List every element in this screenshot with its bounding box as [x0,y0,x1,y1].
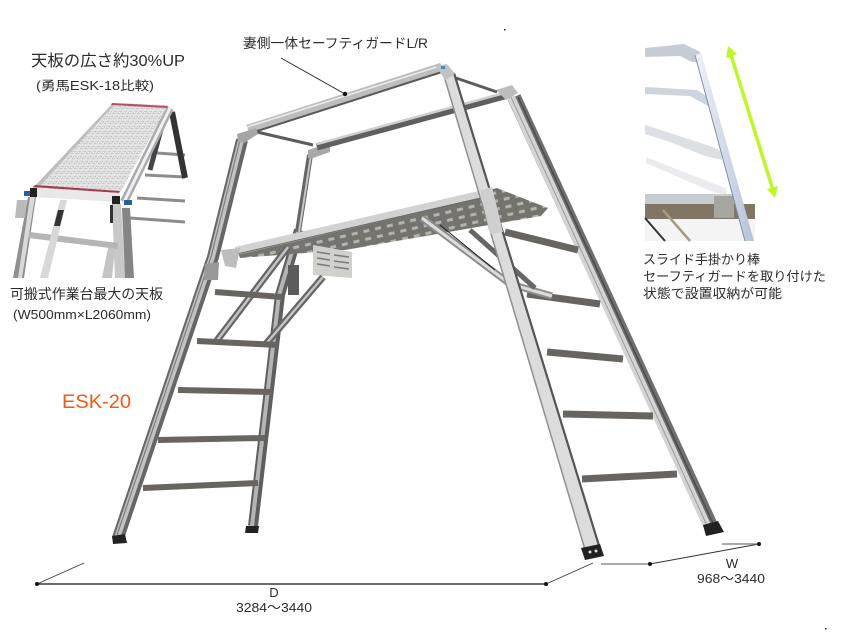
label W: W [726,556,739,571]
back top rail [317,85,518,147]
caption: dimensions: (W500mm×L2060mm) [13,308,151,322]
instruction label [313,245,352,278]
title: tabletop width: 天板の広さ約30%UP [31,52,185,70]
cross bars [257,77,497,145]
base [645,194,740,204]
rungs: left [143,292,282,488]
sliding post [695,53,754,241]
caption: handrail: セーフティガードを取り付けた [643,269,826,284]
value D: 3284～3440 [236,600,312,615]
deck underside [235,188,548,258]
arrow: lime double-headed [726,46,778,198]
back-left leg hinge [288,265,299,295]
caption: largest tabletop: 可搬式作業台最大の天板 [10,286,163,302]
value W: 968～3440 [697,571,765,586]
photo: slide handrail [645,44,755,241]
back-left leg [245,230,299,533]
specks [504,29,826,630]
deck [33,103,168,193]
photo: tabletop close-up [13,103,185,278]
arms [645,44,702,62]
rungs: right [505,232,677,479]
back-left post [298,143,330,232]
caption: handrail: 状態で設置収納が可能 [643,286,782,301]
callout line [281,58,347,96]
main product: work platform [112,58,724,560]
label D: D [269,585,279,600]
back legs [124,108,185,222]
back-right leg [511,97,724,536]
braces [215,218,552,345]
front-right leg [436,64,604,560]
front legs [13,197,36,278]
caption: handrail: スライド手掛かり棒 [643,252,760,267]
guard label: 妻側一体セーフティガードL/R [243,36,428,51]
caption: handrail [643,252,826,301]
subtitle: comparison: (勇馬ESK-18比較) [36,79,154,93]
front top rail [237,63,446,143]
dimension lines [35,542,761,586]
front-left leg [112,140,242,544]
model name: ESK-20 [62,391,131,413]
